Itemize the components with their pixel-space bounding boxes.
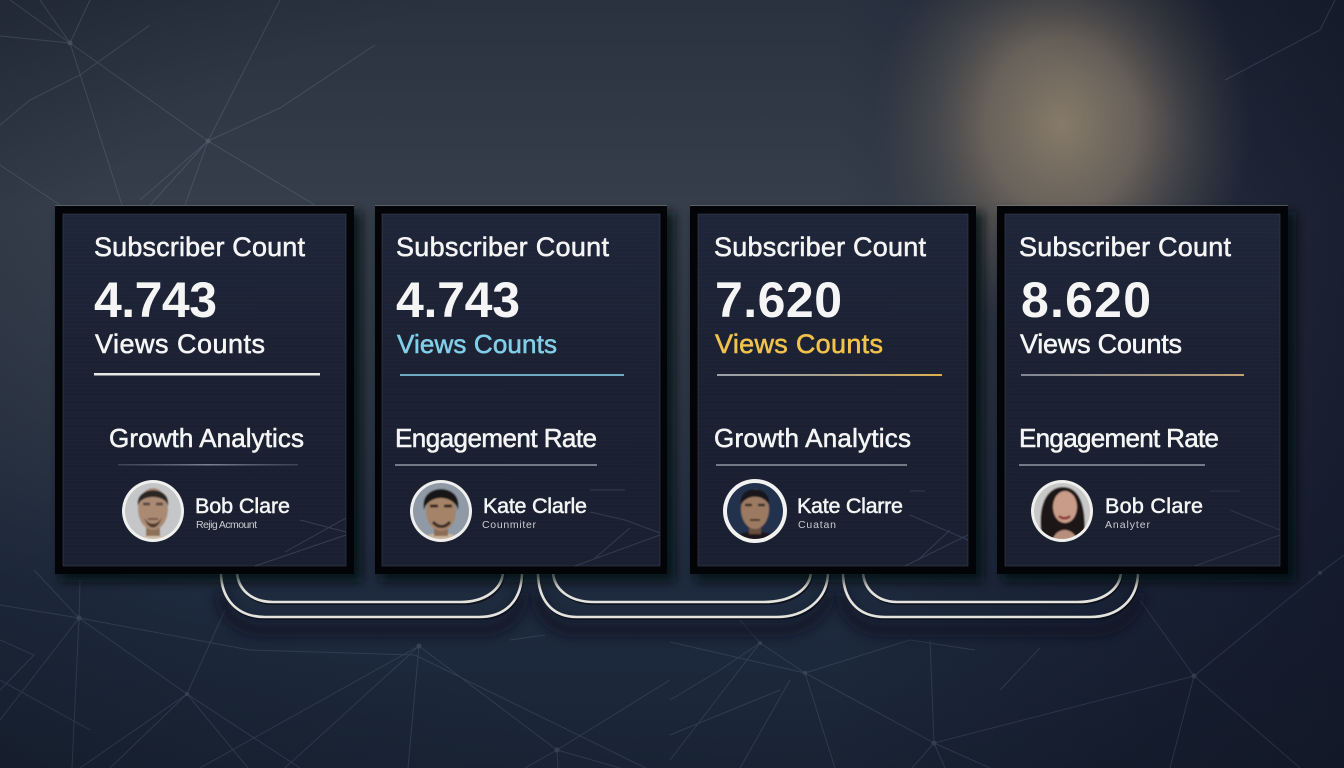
connector: cards 1 and 2 [221,572,523,630]
subheading: Engagement Rate [1019,423,1219,453]
heading: Subscriber Count [94,232,305,262]
person name: Kate Clarle [483,494,587,518]
person name: Bob Clare [195,494,290,518]
person name: Bob Clare [1105,494,1203,518]
connector wires [221,572,1139,630]
subheading: Engagement Rate [395,423,597,453]
number: 4.743 [396,272,520,328]
panel: card 3 [690,205,984,582]
heading: Subscriber Count [396,232,609,262]
panel: card 1 [55,205,362,582]
role: Analyter [1105,519,1150,531]
label: Views Counts [397,329,557,359]
avatar [723,479,787,544]
number: 4.743 [94,272,217,328]
label: Views Counts [1020,329,1182,359]
number: 8.620 [1021,272,1151,328]
heading: Subscriber Count [714,232,926,262]
avatar [410,480,472,542]
avatar [1031,480,1093,542]
subheading: Growth Analytics [109,423,304,453]
role: Counmiter [482,519,536,531]
panel: card 2 [375,205,675,582]
connector: cards 2 and 3 [538,572,829,630]
network lines: top [0,0,1335,205]
network lines: bottom [0,555,1344,768]
subheading: Growth Analytics [714,423,911,453]
panel: card 4 [997,205,1296,582]
role: Cuatan [798,519,836,531]
role: Rejig Acmount [196,519,257,531]
label: Views Counts [715,329,883,359]
connector: cards 3 and 4 [843,572,1139,630]
number: 7.620 [715,272,842,328]
person name: Kate Clarre [797,494,903,518]
label: Views Counts [95,329,265,359]
heading: Subscriber Count [1019,232,1231,262]
avatar [122,480,184,542]
